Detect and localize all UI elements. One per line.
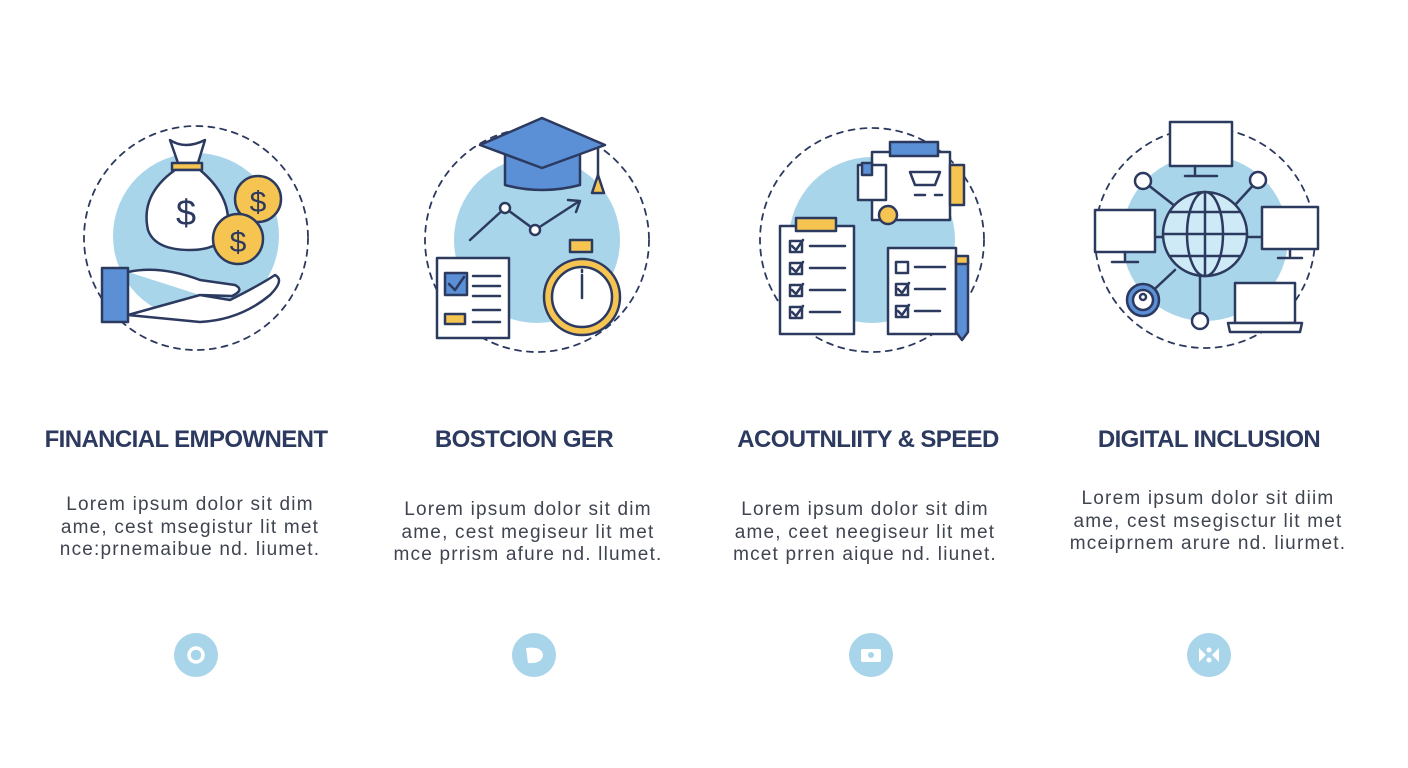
text: panel 1: ame, cest msegistur lit met [61,516,319,538]
icon: globe network with devices [1094,120,1320,349]
text: panel 3: ame, ceet neegiseur lit met [735,522,995,542]
text: panel 3 [733,499,997,565]
icon: graduation cap, chart, stopwatch [424,116,650,353]
text: panel 3: mcet prren aique nd. liunet. [733,544,997,565]
text: panel 2: ame, cest megiseur lit met [402,522,654,542]
icon: money bag on hand: $ [230,226,247,259]
heading: digital inclusion: DIGITAL INCLUSION [1098,426,1320,453]
icon: money bag on hand: $ [176,192,196,233]
panel: digital inclusion [1094,120,1320,349]
text: panel 4: ame, cest msegisctur lit met [1073,510,1343,532]
icon: money bag on hand: $ [250,186,267,219]
heading: financial empowerment: FINANCIAL EMPOWNENT [45,426,327,453]
icon: dot 3 [849,633,893,677]
text: panel 3: Lorem ipsum dolor sit dim [741,499,989,520]
panel: financial empowerment [83,125,309,351]
text: panel 2 [393,499,663,565]
icon: dot 1 [174,633,218,677]
text: panel 4 [1070,488,1346,554]
icon: dot 4 [1187,633,1231,677]
heading: accountability: ACOUTNLIITY & SPEED [737,426,999,453]
panel: accountability [759,127,985,353]
icon: checklists and documents [759,127,985,353]
text: panel 2: mce prrism afure nd. llumet. [393,544,663,565]
text: panel 2: Lorem ipsum dolor sit dim [404,499,652,520]
icon: dot 2 [512,633,556,677]
text: panel 1 [60,494,320,560]
text: panel 4: mceiprnem arure nd. liurmet. [1070,533,1346,554]
panel: graduation [424,116,650,353]
heading: bostcion ger: BOSTCION GER [435,426,613,453]
icon: money bag on hand [83,125,309,351]
text: panel 4: Lorem ipsum dolor sit diim [1082,488,1334,509]
text: panel 1: nce:prnemaibue nd. liumet. [60,539,320,560]
bottom icons [174,633,1231,677]
text: panel 1: Lorem ipsum dolor sit dim [66,494,314,515]
